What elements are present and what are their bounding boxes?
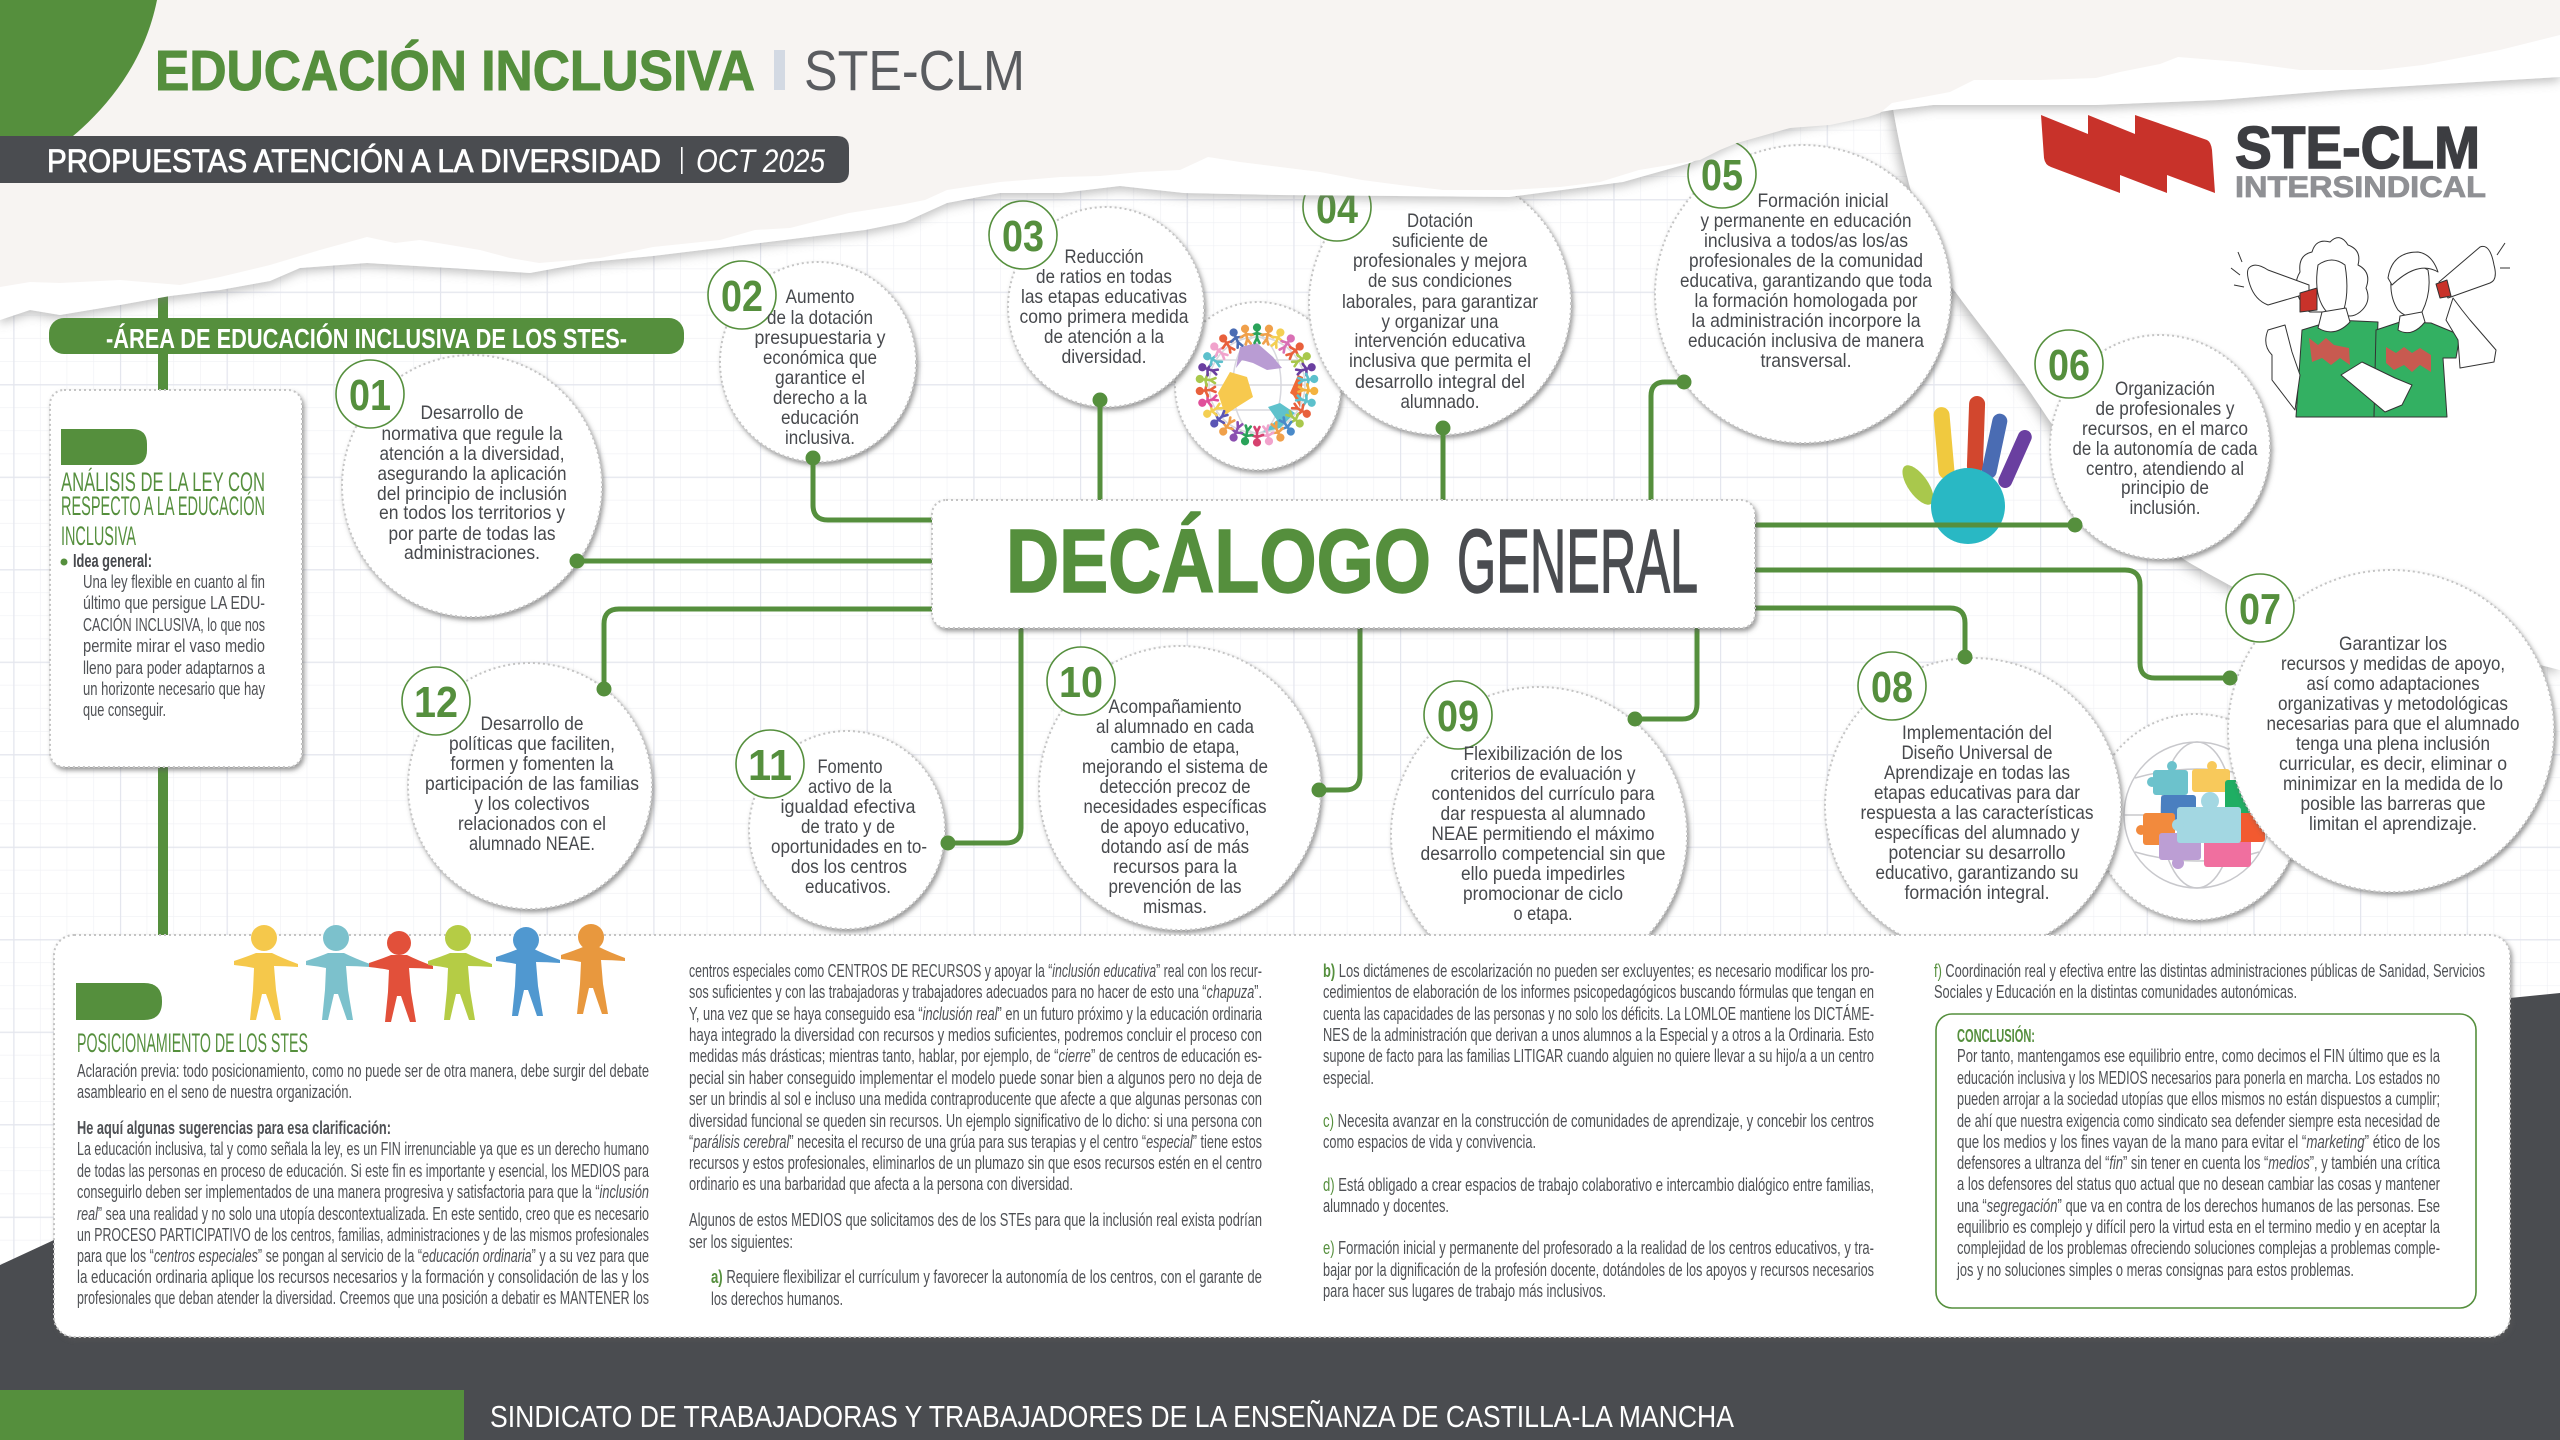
logo STE-CLM xyxy=(2041,115,2486,204)
item 10: necesidades específicas xyxy=(1084,796,1267,818)
idea general: un horizonte necesario que hay xyxy=(83,678,266,699)
item 01: por parte de todas las xyxy=(388,523,556,545)
area pill: -ÁREA DE EDUCACIÓN INCLUSIVA DE LOS STES- xyxy=(106,323,627,354)
illustration: two people with megaphones xyxy=(2231,238,2510,417)
card heading: INCLUSIVA xyxy=(61,521,136,551)
item 05: inclusiva a todos/as los/as xyxy=(1704,230,1908,252)
icon: people holding hands xyxy=(234,924,625,1022)
item 08: respuesta a las características xyxy=(1860,802,2094,824)
column 1: He aquí algunas sugerencias para esa clarificación: xyxy=(77,1117,391,1138)
item 03: 03 xyxy=(1002,212,1044,261)
logo STE-CLM: INTERSINDICAL xyxy=(2235,171,2486,204)
item 04 xyxy=(1303,171,1571,435)
idea general: permite mirar el vaso medio xyxy=(83,635,265,656)
column 4 xyxy=(1934,960,2485,1002)
item 02 xyxy=(708,261,916,462)
item 01 xyxy=(336,355,602,617)
item 12: relacionados con el xyxy=(458,813,606,835)
item 04: 04 xyxy=(1316,184,1358,233)
idea general xyxy=(60,550,266,720)
item 12: 12 xyxy=(414,678,458,727)
callout: conclusion xyxy=(1936,1014,2476,1308)
item 02: derecho a la xyxy=(773,387,867,409)
item 07: organizativas y metodológicas xyxy=(2278,693,2508,715)
item 06: principio de xyxy=(2121,477,2209,499)
item 08: formación integral. xyxy=(1904,882,2050,904)
item 06: recursos, en el marco xyxy=(2082,418,2248,440)
callout: conclusion: defensores a ultranza del “fin” sin tener en cuenta los “medios”, y también una crítica xyxy=(1957,1152,2440,1173)
idea general: CACIÓN INCLUSIVA, lo que nos xyxy=(83,614,265,635)
item 12: políticas que faciliten, xyxy=(449,733,615,755)
item 02: inclusiva. xyxy=(785,427,855,449)
item 09: o etapa. xyxy=(1514,903,1572,925)
item 03 xyxy=(989,201,1204,407)
item 08 xyxy=(1825,652,2121,954)
item 03: diversidad. xyxy=(1062,346,1146,368)
column 3: cuenta las capacidades de las personas y no solo los déficits. La LOMLOE mantiene los DICTÁME- xyxy=(1323,1003,1874,1024)
item 07: minimizar en la medida de lo xyxy=(2283,773,2503,795)
item 09 xyxy=(1391,681,1687,983)
column 3: especial. xyxy=(1323,1067,1374,1088)
item 06: centro, atendiendo al xyxy=(2086,458,2244,480)
heading: POSICIONAMIENTO DE LOS STES xyxy=(77,1028,308,1058)
item 08: específicas del alumnado y xyxy=(1874,822,2080,844)
item 09: NEAE permitiendo el máximo xyxy=(1432,823,1655,845)
item 11: activo de la xyxy=(808,776,892,798)
column 2: “parálisis cerebral” necesita el recurso de una grúa para sus terapias y el centro “especial” tiene estos xyxy=(689,1131,1262,1152)
column 2: ser un brindis al sol e incluso una medida contraproducente que afecte a que algunas personas con xyxy=(689,1088,1262,1109)
callout: conclusion: que los medios y los fines vayan de la mano para evitar el “marketing” ético de los xyxy=(1957,1131,2440,1152)
item 07 xyxy=(2226,570,2554,892)
item 04: desarrollo integral del xyxy=(1355,371,1525,393)
item 05: profesionales de la comunidad xyxy=(1689,250,1923,272)
item 11: dos los centros xyxy=(791,856,907,878)
item 12: alumnado NEAE. xyxy=(469,833,595,855)
item 07: así como adaptaciones xyxy=(2306,673,2480,695)
column 3: cedimientos de elaboración de los informes psicopedagógicos buscando fórmulas que tengan en xyxy=(1323,981,1874,1002)
item 09: Flexibilización de los xyxy=(1464,743,1623,765)
item 04: intervención educativa xyxy=(1354,330,1526,352)
item 11 xyxy=(736,730,945,929)
item 01: administraciones. xyxy=(404,542,540,564)
column 3: d) Está obligado a crear espacios de trabajo colaborativo e intercambio dialógico entre familias, xyxy=(1323,1174,1874,1195)
column 1: La educación inclusiva, tal y como señala la ley, es un FIN irrenunciable ya que es un derecho humano xyxy=(77,1138,649,1159)
item 12 xyxy=(402,663,652,909)
item 10: recursos para la xyxy=(1113,856,1237,878)
item 12: participación de las familias xyxy=(425,773,639,795)
column 1 xyxy=(77,1060,649,1308)
idea general: Idea general: xyxy=(73,550,152,571)
item 05: la formación homologada por xyxy=(1694,290,1918,312)
tab xyxy=(61,429,147,465)
item 12: formen y fomenten la xyxy=(450,753,614,775)
item 05: transversal. xyxy=(1760,350,1852,372)
column 1: real” sea una realidad y no solo una utopía descontextualizada. En este sentido, creo que es necesario xyxy=(77,1203,649,1224)
column 1: la educación ordinaria aplique los recursos necesarios y la formación y consolidación de las y los xyxy=(77,1266,649,1287)
item 10: mismas. xyxy=(1143,896,1207,918)
item 06: de profesionales y xyxy=(2096,398,2235,420)
connectors xyxy=(570,374,2238,850)
item 07: limitan el aprendizaje. xyxy=(2309,813,2477,835)
item 04: alumnado. xyxy=(1400,391,1480,413)
column 4: Sociales y Educación en la distintas comunidades autonómicas. xyxy=(1934,981,2297,1002)
footer xyxy=(0,1390,1734,1440)
item 01: atención a la diversidad, xyxy=(380,443,564,465)
title: EDUCACIÓN INCLUSIVA xyxy=(155,39,755,103)
item 02: económica que xyxy=(763,347,877,369)
item 09: promocionar de ciclo xyxy=(1463,883,1623,905)
item 05: Formación inicial xyxy=(1758,190,1888,212)
column 3: supone de facto para las familias LITIGAR cuando alguien no quiere llevar a su hijo/a a un centro xyxy=(1323,1045,1874,1066)
column 1: para que los “centros especiales” se pongan al servicio de la “educación ordinaria” y a su vez para que xyxy=(77,1245,649,1266)
item 11: Fomento xyxy=(818,756,883,778)
column 2: ordinario es una barbaridad que afecta a la persona con diversidad. xyxy=(689,1173,1073,1194)
item 10: 10 xyxy=(1059,658,1103,707)
column 2: sos suficientes y con las trabajadoras y trabajadores adecuados para no hacer de esto una “chapuza”. xyxy=(689,981,1262,1002)
column 1: profesionales que deban atender la diversidad. Creemos que una posición a debatir es MANTENER los xyxy=(77,1287,649,1308)
item 06: de la autonomía de cada xyxy=(2072,438,2258,460)
subtitle bar: OCT 2025 xyxy=(696,143,825,179)
item 01: normativa que regule la xyxy=(382,423,563,445)
item 05: y permanente en educación xyxy=(1700,210,1912,232)
item 08: educativo, garantizando su xyxy=(1876,862,2078,884)
item 02: educación xyxy=(781,407,859,429)
item 08: 08 xyxy=(1871,663,1913,712)
item 05: 05 xyxy=(1701,151,1743,200)
item 03: de atención a la xyxy=(1044,326,1164,348)
item 04: y organizar una xyxy=(1382,311,1499,333)
item 08: Implementación del xyxy=(1902,722,2052,744)
item 09: contenidos del currículo para xyxy=(1432,783,1655,805)
card heading xyxy=(61,467,265,551)
item 06: Organización xyxy=(2115,378,2215,400)
column 2: Y, una vez que se haya conseguido esa “inclusión real” en un futuro próximo y la educación ordinaria xyxy=(689,1003,1262,1024)
column 3: NES de la administración que derivan a unos alumnos a la Especial y a otros a la Ordinaria. Esto xyxy=(1323,1024,1874,1045)
icon: puzzle globe circle xyxy=(2093,714,2299,920)
item 11: igualdad efectiva xyxy=(780,796,916,818)
item 07: necesarias para que el alumnado xyxy=(2266,713,2520,735)
column 2: medidas más drásticas; mientras tanto, hablar, por ejemplo, de “cierre” de centros de educación es- xyxy=(689,1045,1262,1066)
idea general: último que persigue LA EDU- xyxy=(83,592,265,613)
footer: SINDICATO DE TRABAJADORAS Y TRABAJADORES DE LA ENSEÑANZA DE CASTILLA-LA MANCHA xyxy=(490,1399,1734,1434)
item 09: desarrollo competencial sin que xyxy=(1420,843,1666,865)
column 2: pecial sin haber conseguido implementar el modelo puede sonar bien a algunos pero no deja de xyxy=(689,1067,1262,1088)
item 09: dar respuesta al alumnado xyxy=(1440,803,1646,825)
item 08: potenciar su desarrollo xyxy=(1888,842,2066,864)
item 10: prevención de las xyxy=(1108,876,1242,898)
item 05 xyxy=(1655,140,1951,443)
central vertical line xyxy=(158,285,168,940)
subtitle bar xyxy=(0,136,849,183)
item 10: Acompañamiento xyxy=(1108,696,1242,718)
item 05: la administración incorpore la xyxy=(1692,310,1921,332)
item 10: mejorando el sistema de xyxy=(1082,756,1268,778)
item 06: 06 xyxy=(2048,341,2090,390)
column 3: para hacer sus lugares de trabajo más inclusivos. xyxy=(1323,1280,1606,1301)
item 10 xyxy=(1039,646,1321,930)
column 1: Aclaración previa: todo posicionamiento, como no puede ser de otra manera, debe surgir del debate xyxy=(77,1060,649,1081)
item 02: de la dotación xyxy=(767,307,873,329)
item 10: dotando así de más xyxy=(1101,836,1249,858)
icon: world with children circle xyxy=(1175,302,1341,470)
column 1: un PROCESO PARTICIPATIVO de los centros, familias, administraciones y de las mismos profesionales xyxy=(77,1224,649,1245)
item 03: Reducción xyxy=(1064,246,1144,268)
item 04: de sus condiciones xyxy=(1368,270,1512,292)
torn paper top xyxy=(0,0,2560,320)
item 09: 09 xyxy=(1437,692,1479,741)
tab xyxy=(76,983,162,1020)
item 11: educativos. xyxy=(805,876,891,898)
column 3 xyxy=(1323,960,1874,1301)
item 10: cambio de etapa, xyxy=(1110,736,1240,758)
item 03: las etapas educativas xyxy=(1021,286,1187,308)
item 04: inclusiva que permita el xyxy=(1349,350,1531,372)
column 1: de todas las personas en proceso de educación. Si este fin es importante y esencial, los MEDIOS para xyxy=(77,1160,649,1181)
item 08: etapas educativas para dar xyxy=(1874,782,2080,804)
callout: conclusion: CONCLUSIÓN: xyxy=(1957,1025,2035,1046)
column 2: recursos y estos profesionales, eliminarlos de un plumazo sin que esos recursos estén en el centro xyxy=(689,1152,1262,1173)
item 12: Desarrollo de xyxy=(480,713,584,735)
card heading: RESPECTO A LA EDUCACIÓN xyxy=(61,490,265,521)
item 06 xyxy=(2035,330,2270,559)
column 2: haya integrado la diversidad con recursos y medios suficientes, podremos concluir el proceso con xyxy=(689,1024,1262,1045)
central heading box: GENERAL xyxy=(1457,512,1698,612)
item 04: profesionales y mejora xyxy=(1353,250,1527,272)
item 08: Diseño Universal de xyxy=(1902,742,2052,764)
item 02: Aumento xyxy=(786,286,855,308)
item 10: de apoyo educativo, xyxy=(1100,816,1250,838)
column 2: diversidad funcional se queden sin recursos. Un ejemplo significativo de lo dicho: si una persona con xyxy=(689,1110,1262,1131)
column 3: e) Formación inicial y permanente del profesorado a la realidad de los centros educativos, y tra- xyxy=(1323,1237,1874,1258)
item 09: criterios de evaluación y xyxy=(1450,763,1636,785)
idea general: que conseguir. xyxy=(83,699,166,720)
column 1: conseguirlo deben ser implementados de una manera progresiva y satisfactoria para que la “inclusión xyxy=(77,1181,649,1202)
idea general: Una ley flexible en cuanto al fin xyxy=(83,571,265,592)
item 01: 01 xyxy=(349,371,391,420)
column 1: asambleario en el seno de nuestra organización. xyxy=(77,1081,352,1102)
column 3: bajar por la dignificación de la profesión docente, dotándoles de los apoyos y recursos necesarios xyxy=(1323,1259,1874,1280)
item 12: y los colectivos xyxy=(474,793,590,815)
item 07: tenga una plena inclusión xyxy=(2296,733,2490,755)
column 2: centros especiales como CENTROS DE RECURSOS y apoyar la “inclusión educativa” real con los recur- xyxy=(689,960,1262,981)
column 3: alumnado y docentes. xyxy=(1323,1195,1449,1216)
green corner xyxy=(0,0,157,136)
area pill xyxy=(49,318,684,354)
column 3: como espacios de vida y convivencia. xyxy=(1323,1131,1536,1152)
item 02: presupuestaria y xyxy=(754,327,886,349)
item 10: detección precoz de xyxy=(1100,776,1250,798)
column 2: Algunos de estos MEDIOS que solicitamos des de los STEs para que la inclusión real exista podrían xyxy=(689,1209,1262,1230)
heading: decálogo general: DECÁLOGO xyxy=(1006,511,1431,612)
callout: conclusion: jos y no soluciones simples o meras consignas para estos problemas. xyxy=(1956,1259,2354,1280)
item 01: asegurando la aplicación xyxy=(378,463,566,485)
torn white page corner xyxy=(1892,30,2560,670)
title: STE-CLM xyxy=(804,39,1025,103)
item 07: recursos y medidas de apoyo, xyxy=(2281,653,2505,675)
item 02: 02 xyxy=(721,272,763,321)
item 01: del principio de inclusión xyxy=(377,483,567,505)
item 03: de ratios en todas xyxy=(1036,266,1172,288)
item 11: de trato y de xyxy=(801,816,895,838)
item 07: posible las barreras que xyxy=(2300,793,2486,815)
item 02: garantice el xyxy=(775,367,865,389)
icon: hand xyxy=(1897,396,2034,544)
idea general: lleno para poder adaptarnos a xyxy=(83,657,266,678)
item 04: laborales, para garantizar xyxy=(1342,291,1538,313)
item 08: Aprendizaje en todas las xyxy=(1884,762,2070,784)
item 09: ello pueda impedirles xyxy=(1461,863,1625,885)
panel: law analysis card xyxy=(50,390,302,767)
item 05: educación inclusiva de manera xyxy=(1688,330,1924,352)
logo STE-CLM: STE-CLM xyxy=(2235,115,2480,181)
column 2: ser los siguientes: xyxy=(689,1231,793,1252)
item 01: en todos los territorios y xyxy=(379,502,565,524)
column 3: b) Los dictámenes de escolarización no pueden ser excluyentes; es necesario modificar los pro- xyxy=(1323,960,1874,981)
item 07: Garantizar los xyxy=(2339,633,2447,655)
item 07: 07 xyxy=(2239,585,2281,634)
item 04: suficiente de xyxy=(1392,230,1488,252)
column 2 xyxy=(689,960,1262,1309)
item 05: educativa, garantizando que toda xyxy=(1680,270,1932,292)
card heading: ANÁLISIS DE LA LEY CON xyxy=(61,467,265,497)
column 3: c) Necesita avanzar en la construcción de comunidades de aprendizaje, y concebir los centros xyxy=(1323,1110,1874,1131)
central heading box xyxy=(932,500,1755,628)
item 06: inclusión. xyxy=(2130,497,2200,519)
column 2: a) Requiere flexibilizar el currículum y favorecer la autonomía de los centros, con el garante de xyxy=(711,1266,1262,1287)
dark bottom background xyxy=(0,993,2560,1440)
subtitle bar: PROPUESTAS ATENCIÓN A LA DIVERSIDAD xyxy=(47,143,661,179)
item 07: curricular, es decir, eliminar o xyxy=(2279,753,2507,775)
item 01: Desarrollo de xyxy=(420,402,524,424)
panel: positioning xyxy=(54,924,2510,1337)
item 10: al alumnado en cada xyxy=(1096,716,1254,738)
item 11: 11 xyxy=(748,741,792,790)
column 2: los derechos humanos. xyxy=(711,1288,843,1309)
item 11: oportunidades en to- xyxy=(771,836,927,858)
item 03: como primera medida xyxy=(1020,306,1189,328)
item 04: Dotación xyxy=(1407,210,1473,232)
